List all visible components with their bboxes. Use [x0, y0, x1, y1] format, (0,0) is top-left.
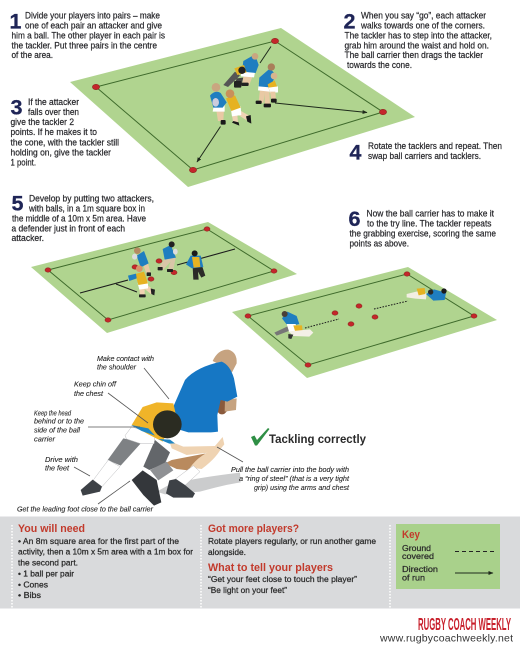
panel: key: [396, 524, 500, 589]
callout: keep chin off the chest: [74, 380, 148, 423]
step 2 text: towards the cone.: [347, 60, 412, 70]
panel: you will need: activity, then a 10m x 5m area with a 1m box for: [18, 546, 193, 556]
players: right pair: [256, 63, 278, 107]
cones: [92, 38, 387, 173]
panel: you will need: You will need: [18, 523, 85, 535]
tackler's sleeve: [158, 439, 175, 444]
callout: leading foot: [17, 481, 153, 514]
step 4 text: swap ball carriers and tacklers.: [368, 151, 481, 161]
step 3 text: If the attacker: [28, 97, 79, 107]
step 5 text: Develop by putting two attackers,: [29, 194, 154, 204]
panel: key: Direction: [402, 564, 438, 574]
step 6 text: points as above.: [350, 238, 409, 248]
panel: grey information strip: [0, 516, 520, 608]
callout: make contact with the shoulder: the shoulder: [97, 362, 136, 372]
step 4 text: [350, 140, 502, 164]
panel: what to tell your players: [208, 562, 357, 595]
tackler's head: [153, 410, 182, 438]
cones: [245, 272, 477, 367]
panel: you will need: • Cones: [18, 580, 48, 590]
step 1 text: of the area.: [12, 50, 53, 60]
step 1 text: one of each pair an attacker and give: [25, 20, 162, 30]
step 2 text: The ball carrier then drags the tackler: [344, 50, 483, 60]
step 3 text: give the tackler 2: [10, 117, 74, 127]
step 3 text: falls over then: [28, 107, 79, 117]
callout: ring of steel: Pull the ball carrier into the body with: [231, 465, 349, 474]
panel: you will need: [18, 523, 193, 600]
step 5 text: a defender just in front of each: [12, 224, 125, 234]
callout: keep the head behind: [34, 408, 140, 444]
step 1 text: the tackler. Put three pairs in the centre: [12, 40, 157, 50]
panel: what to tell your players: “Be light on your feet”: [208, 585, 287, 595]
step 2 text: When you say “go”, each attacker: [361, 10, 486, 20]
step 2 text: The tackler has to step into the attacker,: [344, 30, 492, 40]
callout: keep the head behind: carrier: [34, 434, 55, 444]
players: top pair: [223, 53, 259, 88]
callout: keep chin off the chest: Keep chin off: [74, 380, 117, 388]
step 4 text: Rotate the tacklers and repeat. Then: [368, 141, 502, 151]
callout: make contact with the shoulder: Make contact with: [97, 354, 154, 363]
tackler's near leg: [81, 438, 142, 496]
panel: you will need: • Bibs: [18, 590, 41, 600]
players: left pair: [210, 83, 251, 126]
panel: you will need: the second part.: [18, 558, 78, 568]
panel: got more players: [208, 523, 376, 557]
step 3 text: points. If he makes it to: [10, 127, 97, 137]
ground covered dashes: [305, 301, 408, 328]
icon: green tick: [251, 428, 270, 446]
step 5 text: 5: [12, 192, 24, 216]
panel: you will need: • 1 ball per pair: [18, 568, 74, 578]
players: tackle near the cones: [274, 311, 313, 339]
callout: keep the head behind: behind or to the: [34, 416, 84, 426]
panel: what to tell your players: “Get your feet close to touch the player”: [208, 574, 357, 584]
callout: keep the head behind: Keep the head: [34, 408, 72, 418]
callout: leading foot: Get the leading foot close to the ball carrier: [17, 504, 153, 514]
step 2 text: 2: [344, 10, 356, 34]
panel: got more players: Rotate players regularly, or run another game: [208, 536, 376, 546]
panel: key: Ground: [402, 543, 431, 553]
callout: keep the head behind: side of the ball: [34, 426, 80, 434]
step 6 text: 6: [348, 207, 360, 231]
step 2 text: [344, 10, 492, 70]
callout: keep chin off the chest: the chest: [74, 389, 104, 398]
panel: got more players: Got more players?: [208, 523, 299, 535]
panel: you will need: • An 8m square area for the first part of the: [18, 536, 179, 546]
step 3 text: the cone, with the tackler still: [10, 138, 119, 148]
pitch 6: rectangle with try line run: [232, 267, 497, 378]
step 5 text: [12, 192, 154, 243]
step 1 text: him a ball. The other player in each pair is: [12, 30, 166, 40]
panel: key: Key: [402, 529, 421, 541]
step 2 text: walks towards one of the corners.: [360, 20, 485, 30]
ball carrier's forearm and ball: [215, 394, 237, 414]
step 3 text: holding on, give the tackler: [10, 148, 111, 158]
panel: key: of run: [402, 572, 425, 582]
step 3 text: [10, 96, 119, 168]
callout: make contact with the shoulder: [97, 354, 169, 399]
ground covered lines: [80, 249, 235, 293]
step 6 text: the grabbing exercise, scoring the same: [350, 228, 496, 238]
ball carrier's head: [213, 350, 237, 372]
pitch 1: square grid with three pairs: [70, 28, 415, 187]
step 1 text: [10, 10, 166, 60]
tackler's white shorts: [125, 427, 155, 444]
ball carrier's white shorts: [179, 431, 224, 447]
callout: ring of steel: grip) using the arms and chest: [254, 483, 350, 492]
ball carrier's legs: [165, 445, 223, 498]
callout: ring of steel: [217, 447, 350, 492]
step 1 text: Divide your players into pairs – make: [25, 10, 160, 20]
main tackle illustration: [81, 350, 241, 506]
panel: key: covered: [402, 551, 434, 561]
callout: drive with the feet: [45, 455, 90, 476]
cones: [45, 227, 277, 322]
pitch 5: rectangle with centre box and two pairs: [31, 222, 297, 333]
ground shadow: [157, 473, 241, 494]
panel: got more players: alongside.: [208, 547, 246, 557]
tackler's yellow shirt: [132, 402, 176, 442]
players: [128, 241, 205, 297]
callout: drive with the feet: the feet: [45, 464, 70, 472]
step 3 text: 3: [10, 96, 22, 120]
step 5 text: the middle of a 10m x 5m area. Have: [12, 214, 146, 224]
step 3 text: 1 point.: [10, 158, 36, 168]
tackler's arm: [169, 437, 224, 455]
ball carrier's blue shirt: [173, 362, 237, 432]
step 6 text: Now the ball carrier has to make it: [366, 208, 495, 218]
players: tackle at the try line: [407, 288, 447, 301]
arrows to corners: [197, 46, 367, 162]
panel: what to tell your players: What to tell your players: [208, 562, 333, 574]
callout: ring of steel: a “ring of steel” (that is a very tight: [239, 474, 350, 483]
callout: drive with the feet: Drive with: [45, 455, 78, 464]
step 6 text: to the try line. The tackler repeats: [367, 218, 492, 228]
step 2 text: grab him around the waist and hold on.: [344, 40, 489, 50]
tackler's shirt trim: [131, 425, 155, 436]
step 6 text: [348, 207, 496, 248]
tackler's far leg: [132, 440, 173, 506]
step 4 text: 4: [350, 140, 362, 164]
step 1 text: 1: [10, 10, 22, 34]
website address: www.rugbycoachweekly.net: [379, 632, 513, 644]
step 5 text: attacker.: [12, 233, 44, 243]
step 5 text: with balls, in a 1m square box in: [28, 204, 145, 214]
heading: tackling correctly: Tackling correctly: [269, 434, 367, 446]
